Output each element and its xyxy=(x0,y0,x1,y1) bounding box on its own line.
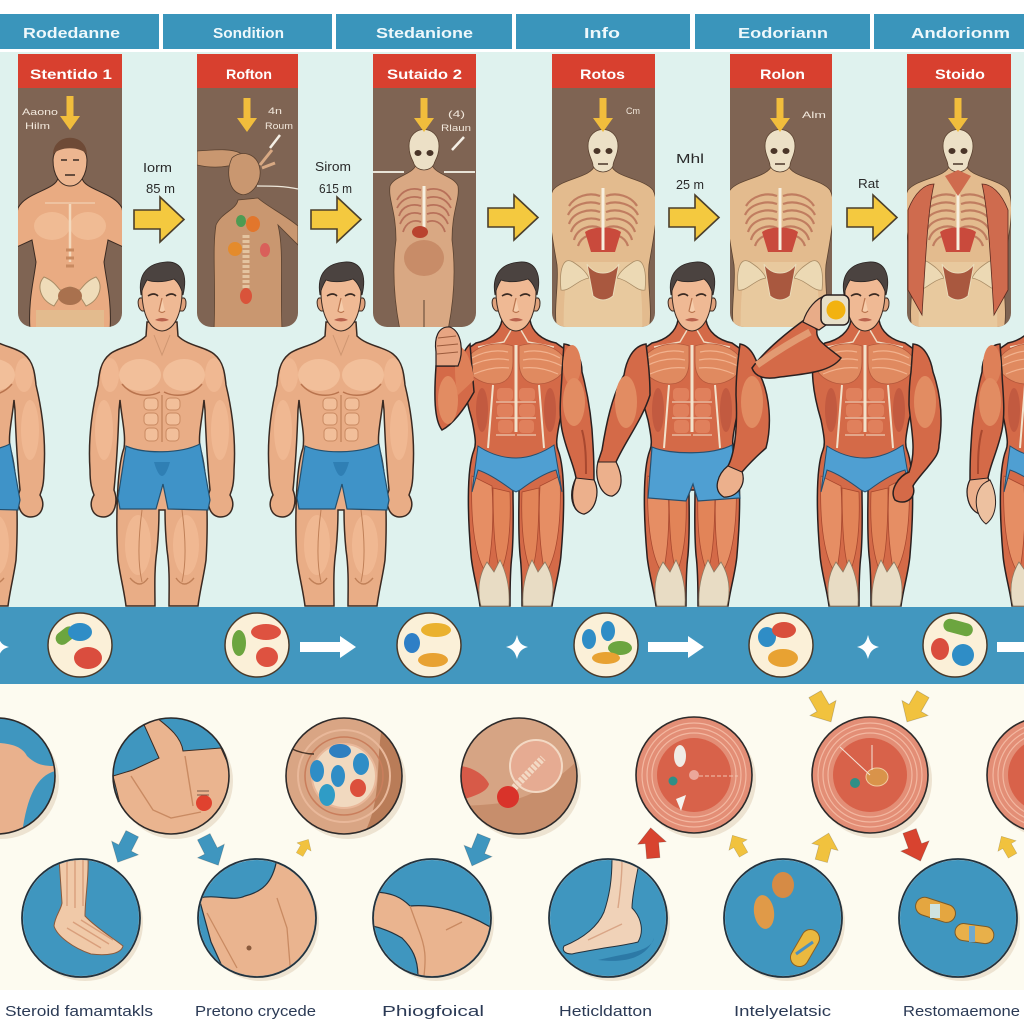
header row of stage tabs: Andorionm xyxy=(911,25,1010,42)
lower circle 6: capsules xyxy=(899,859,1020,981)
panel 5 note: Alm xyxy=(802,110,826,121)
upper circle 1: shoulder xyxy=(0,718,59,839)
arrow 3 xyxy=(488,195,538,240)
red arrow xyxy=(636,827,668,859)
header row of stage tabs xyxy=(0,14,1024,49)
transition label 4: Rat xyxy=(858,176,879,191)
panel 6 red heading: Stoido xyxy=(935,66,985,82)
caption 2: Pretono crycede xyxy=(195,1003,316,1020)
sparkle connector xyxy=(0,635,9,659)
blue band with pill icons xyxy=(0,607,1024,684)
panel 6: muscles over skeleton xyxy=(905,54,1011,330)
panel 2 red heading: Rofton xyxy=(226,66,272,82)
lower circle 5: capsules xyxy=(724,859,845,981)
small connector arrows xyxy=(104,687,1022,872)
caption 3: Phiogfoical xyxy=(382,1003,484,1020)
yellow arrow xyxy=(292,835,316,859)
panel 1 red heading xyxy=(18,54,122,88)
transition label 3: 25 m xyxy=(676,177,704,192)
panel 5 red heading: Rolon xyxy=(760,66,805,82)
pale scene backdrop xyxy=(0,52,1024,607)
yellow arrow xyxy=(802,687,844,729)
caption 1: Steroid famamtakls xyxy=(5,1003,153,1020)
transition label 1 xyxy=(143,160,175,196)
blue arrow xyxy=(104,827,146,869)
panel 3 red heading: Sutaido 2 xyxy=(387,66,462,82)
blue arrow xyxy=(190,830,232,872)
caption 6: Restomaemone xyxy=(903,1003,1020,1020)
arrow 4 xyxy=(669,195,719,240)
panel 3 down arrow xyxy=(414,98,434,132)
arrow 2 xyxy=(311,197,361,242)
lower circle 3: arm xyxy=(372,859,494,981)
panel 3 note: (4) xyxy=(448,109,465,120)
white arrow connector xyxy=(648,636,704,658)
lower circle 2: chest xyxy=(198,858,319,981)
white arrow connector xyxy=(300,636,356,658)
yellow arrow xyxy=(894,687,936,729)
pill icon 1 xyxy=(48,613,112,677)
figure: muscle man drinking xyxy=(752,262,941,606)
panel 1 red heading: Stentido 1 xyxy=(30,66,112,82)
blue arrow xyxy=(458,831,498,871)
panel 2 down arrow xyxy=(237,98,257,132)
yellow arrow xyxy=(992,831,1022,861)
yellow arrow xyxy=(723,830,753,860)
white arrow connector xyxy=(997,636,1024,658)
panel 2 note: 4n xyxy=(268,106,282,117)
panel 5 down arrow xyxy=(770,98,790,132)
pill icon 2 xyxy=(225,613,289,677)
header row of stage tabs: Info xyxy=(584,25,620,42)
transition label 3: Mhl xyxy=(676,151,704,166)
panel 1 down arrow xyxy=(60,96,80,130)
panel 6 red heading xyxy=(907,54,1011,88)
yellow drink bottle xyxy=(821,295,849,325)
figure: muscle man raising hand xyxy=(435,262,597,606)
panel 5 red heading xyxy=(730,54,832,88)
pill icon 3 xyxy=(397,613,461,677)
arrow 1 xyxy=(134,197,184,242)
lower circle 4: foot side xyxy=(549,858,670,981)
caption 5: Intelyelatsic xyxy=(734,1003,832,1020)
upper circle 7: muscle cross section xyxy=(987,717,1024,838)
panel 1 note: Aaono xyxy=(22,107,58,118)
transition label 2 xyxy=(315,159,352,196)
transition label 1: Iorm xyxy=(143,160,172,175)
panel 3 note line 2: Rlaun xyxy=(441,123,471,134)
transition label 3 xyxy=(676,151,704,192)
figure: skin man 2 xyxy=(268,262,414,606)
upper circle 3: blue pills in skin xyxy=(286,718,406,839)
panel 4 red heading xyxy=(552,54,655,88)
figure: skin man 1 xyxy=(89,262,235,606)
sparkle connector xyxy=(506,635,528,659)
upper circle 2: chest with red mark xyxy=(113,718,233,839)
header row of stage tabs: Eodoriann xyxy=(738,25,828,42)
header row of stage tabs: Sondition xyxy=(213,25,284,42)
arrow 5 xyxy=(847,195,897,240)
panel 2: organs xyxy=(197,54,298,330)
transition label 1: 85 m xyxy=(146,181,175,196)
panel 5: skeleton and pelvis xyxy=(727,54,833,330)
pill icon 5 xyxy=(749,613,813,677)
panel 4 down arrow xyxy=(593,98,613,132)
panel 2 note line 2: Roum xyxy=(265,121,293,132)
figure: muscle man in shorts xyxy=(597,262,769,606)
header row of stage tabs: Rodedanne xyxy=(23,25,120,42)
panel 4 note: Cm xyxy=(626,106,640,117)
figure: cropped right muscle man xyxy=(967,320,1024,606)
upper circle 4: injection site xyxy=(461,718,581,839)
row of standing figures xyxy=(0,262,1024,606)
upper circle 6: muscle cross section xyxy=(812,717,932,838)
cream lower section xyxy=(0,684,1024,990)
pill icon 6 xyxy=(923,613,987,677)
panel 3: skeleton xyxy=(373,54,476,330)
upper circle 5: muscle cross section xyxy=(636,717,756,838)
pill icon 4 xyxy=(574,613,638,677)
panel 6 down arrow xyxy=(948,98,968,132)
panel 4: skeleton and pelvis xyxy=(550,54,656,330)
lower circle 1: foot xyxy=(22,858,143,981)
header row of stage tabs: Stedanione xyxy=(376,25,473,42)
panel 4 red heading: Rotos xyxy=(580,66,625,82)
sparkle connector xyxy=(857,635,879,659)
yellow arrow xyxy=(808,830,842,864)
caption 4: Heticldatton xyxy=(559,1003,652,1020)
panel 1: skin layer xyxy=(18,54,122,327)
panel 2 red heading xyxy=(197,54,298,88)
transition label 2: Sirom xyxy=(315,159,351,174)
red arrow xyxy=(895,826,935,866)
transition label 2: 615 m xyxy=(319,181,352,196)
figure: cropped left skin man xyxy=(0,342,46,607)
panel 1 note line 2: Hilm xyxy=(25,121,50,132)
panel 3 red heading xyxy=(373,54,476,88)
